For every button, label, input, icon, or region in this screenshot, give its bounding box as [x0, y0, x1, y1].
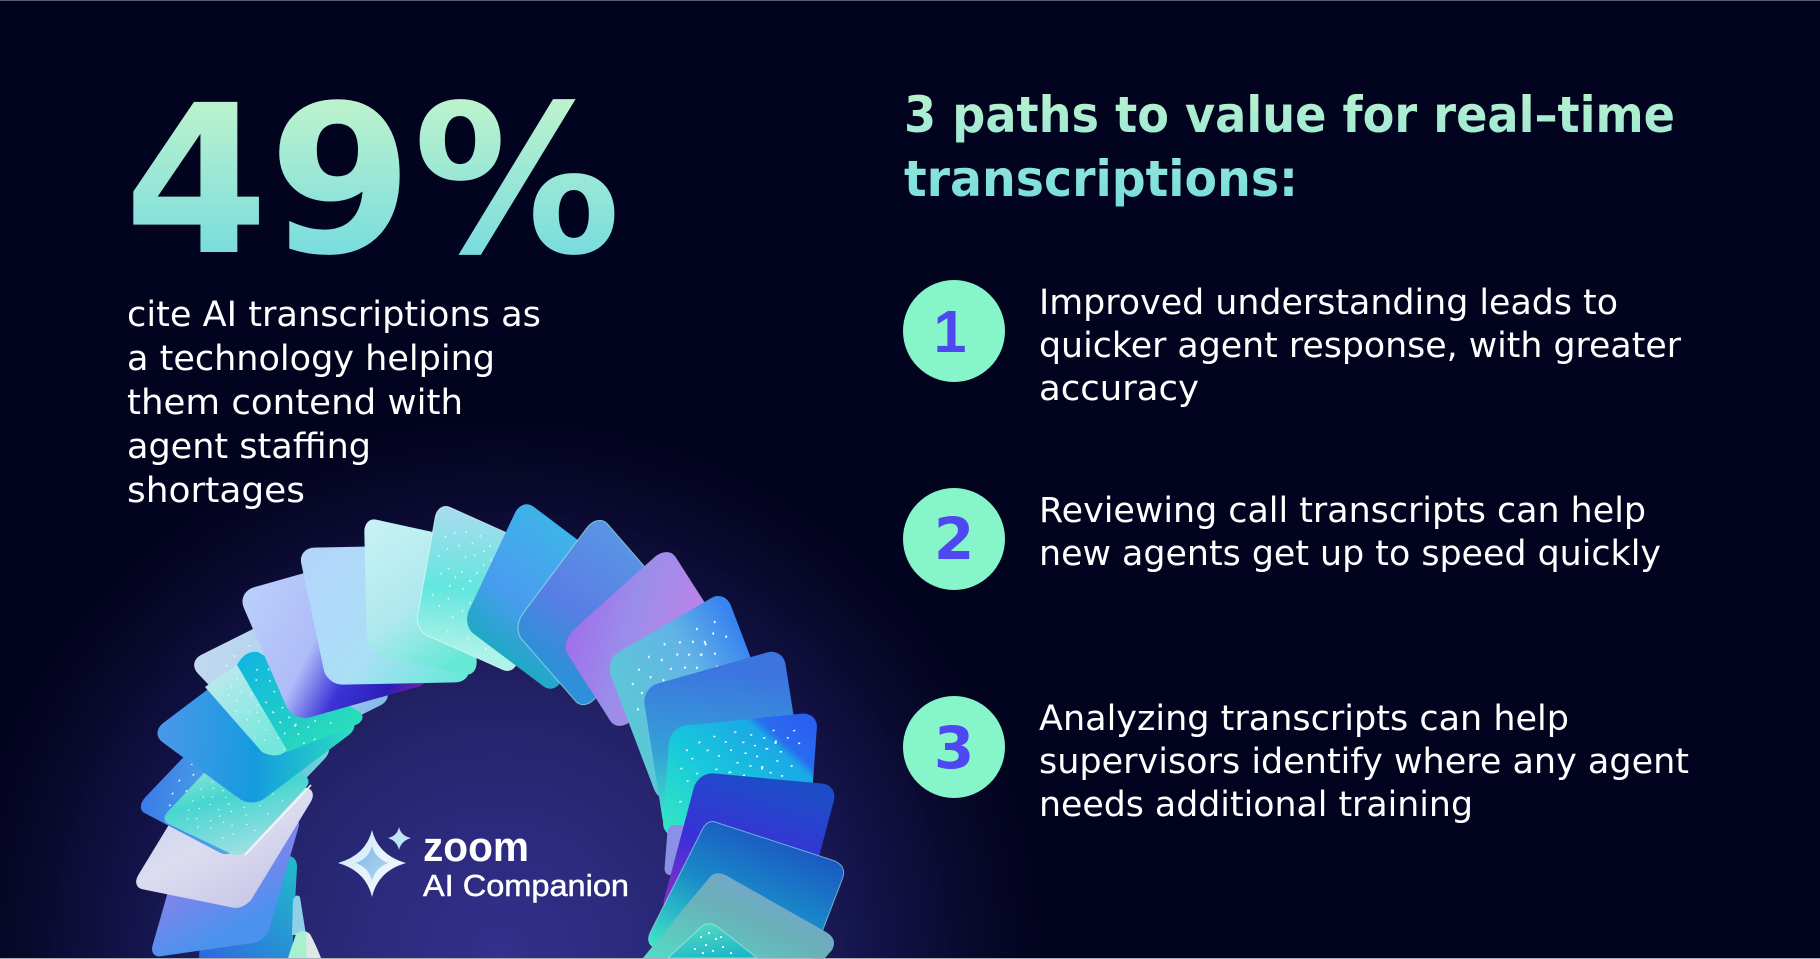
path 1 text: quicker agent response, with greater: [1039, 326, 1682, 366]
icon: small sparkle: [388, 827, 411, 850]
card: upper-left glass: [194, 629, 388, 756]
card: cyan glass: [415, 502, 538, 675]
path 3: [903, 696, 1689, 825]
card: blue to teal: [642, 648, 806, 835]
number badge 2: 2: [934, 505, 974, 573]
path 1 text: accuracy: [1039, 369, 1199, 409]
card: blue: [150, 650, 362, 808]
card: pale cyan: [364, 517, 477, 677]
card: pink violet: [560, 545, 726, 733]
path 1: [903, 280, 1682, 409]
statistic description: a technology helping: [127, 339, 495, 379]
logo word: zoom: zoom: [423, 823, 529, 870]
path 2: [903, 488, 1661, 590]
card arch illustration: [131, 498, 844, 958]
card: pale blue: [298, 545, 472, 685]
path 1 text: [1039, 283, 1682, 409]
heading: 3 paths to value for real–time: [904, 86, 1675, 144]
path 2 text: new agents get up to speed quickly: [1039, 534, 1661, 574]
card: frosted: [643, 873, 834, 958]
logo text: AI Companion: AI Companion: [423, 868, 629, 903]
logo: Zoom AI Companion: [338, 823, 629, 903]
card: navy to teal: [649, 822, 844, 958]
path 3 text: needs additional training: [1039, 785, 1473, 825]
card: small glass sliver: [664, 825, 692, 875]
statistic description: cite AI transcriptions as: [127, 295, 541, 335]
statistic description: agent staffing: [127, 427, 371, 467]
number badge 1: [903, 280, 1005, 382]
card: sky blue: [462, 498, 615, 695]
heading: [904, 86, 1675, 208]
card: right glass: [605, 590, 780, 805]
path 3 text: [1039, 699, 1689, 825]
big statistic: 49%: [124, 61, 621, 301]
card: bottom glass: [668, 924, 757, 958]
card: teal glass: [662, 712, 818, 838]
card: indigo: [660, 772, 838, 928]
heading: transcriptions:: [904, 150, 1298, 208]
statistic description: them contend with: [127, 383, 463, 423]
path 2 text: Reviewing call transcripts can help: [1039, 491, 1646, 531]
path 1 text: Improved understanding leads to: [1039, 283, 1618, 323]
icon: large sparkle: [338, 830, 406, 897]
card: periwinkle: [512, 513, 671, 712]
number badge 1: 1: [934, 299, 966, 365]
number badge 3: 3: [934, 714, 974, 782]
number badge 2: [903, 488, 1005, 590]
number badge 3: [903, 696, 1005, 798]
card: bottom-left stack: [131, 767, 321, 958]
statistic description: shortages: [127, 471, 305, 511]
card: left glass pair: [135, 698, 335, 858]
path 3 text: supervisors identify where any agent: [1039, 742, 1689, 782]
background glow: [0, 410, 1100, 959]
statistic description: [127, 295, 541, 511]
path 3 text: Analyzing transcripts can help: [1039, 699, 1569, 739]
path 2 text: [1039, 491, 1661, 574]
card: purple: [237, 552, 435, 722]
